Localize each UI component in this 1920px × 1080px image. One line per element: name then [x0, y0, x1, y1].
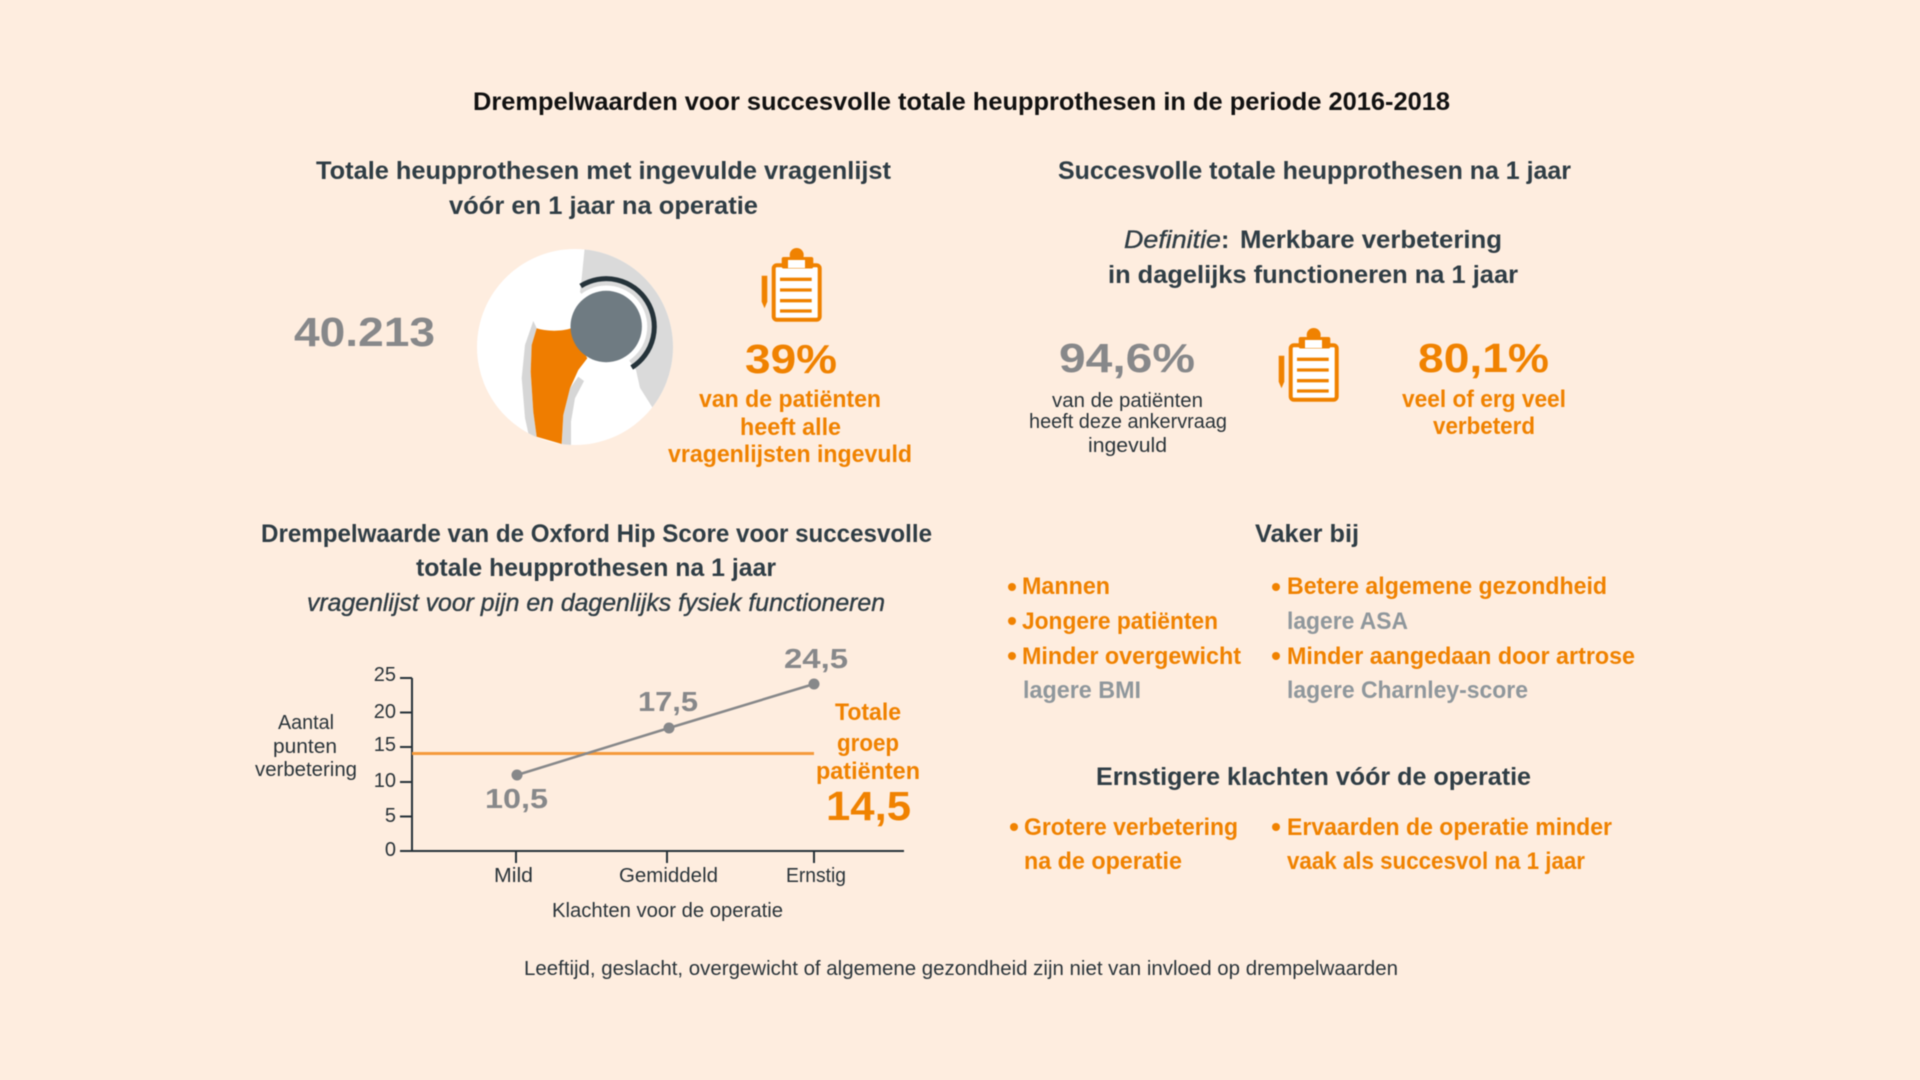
threshold line: [412, 752, 814, 755]
callout: totale groep patiënten: groep: [837, 730, 899, 757]
value labels: 10,5: [485, 783, 548, 814]
caption: 80,1%: verbeterd: [1433, 413, 1535, 440]
caption: 39%: van de patiënten: [699, 386, 881, 413]
value labels: 24,5: [784, 643, 848, 674]
footnote: Leeftijd, geslacht, overgewicht of algemene gezondheid zijn niet van invloed op drempelwaarden: [524, 958, 1398, 980]
y-axis tick labels: 25: [374, 664, 396, 686]
y-axis tick labels: 0: [385, 839, 396, 861]
caption: 94,6%: ingevuld: [1088, 435, 1167, 457]
icon: hip prosthesis: [476, 248, 674, 446]
heading: ingevulde vragenlijst: vóór en 1 jaar na operatie: [449, 192, 758, 220]
y-axis label: [255, 712, 357, 781]
x-axis labels: Mild: [494, 865, 533, 887]
definition: in dagelijks functioneren na 1 jaar: [1108, 261, 1518, 289]
definition: Definitie: [1124, 226, 1221, 254]
callout: totale groep patiënten: Totale: [835, 699, 901, 726]
x-axis labels: Ernstig: [786, 865, 846, 887]
value labels: [485, 643, 848, 814]
list: right column: lagere Charnley-score: [1287, 677, 1528, 704]
panel: ernstigere klachten: [1010, 763, 1612, 875]
icon: clipboard: [762, 248, 820, 320]
y-axis tick labels: [374, 664, 396, 861]
list: left column: Jongere patiënten: [1022, 608, 1218, 635]
heading: Oxford Hip Score: totale heupprothesen na 1 jaar: [416, 554, 776, 582]
definition: Merkbare verbetering: [1240, 226, 1502, 254]
y-axis label: punten: [273, 736, 337, 758]
list: right column: Minder aangedaan door artrose: [1287, 643, 1635, 670]
x-axis labels: Gemiddeld: [619, 865, 718, 887]
heading: vaker bij: Vaker bij: [1255, 520, 1359, 548]
panel: ingevulde vragenlijst: [294, 157, 912, 468]
list: right column: Betere algemene gezondheid: [1287, 573, 1607, 600]
list: ervaarden: [1272, 814, 1612, 875]
callout: totale groep patiënten: patiënten: [816, 758, 920, 785]
x-axis labels: Klachten voor de operatie: [552, 900, 783, 922]
y-axis tick labels: 20: [374, 701, 396, 723]
caption: 80,1%: veel of erg veel: [1402, 386, 1566, 413]
list: grotere verbetering: Grotere verbetering: [1024, 814, 1238, 841]
y-axis label: verbetering: [255, 759, 357, 781]
list: left column: Mannen: [1022, 573, 1110, 600]
caption: 39%: heeft alle: [740, 414, 841, 441]
heading: ernstigere klachten: Ernstigere klachten vóór de operatie: [1096, 763, 1531, 791]
list: right column: [1272, 573, 1635, 704]
list: grotere verbetering: [1010, 814, 1238, 875]
list: right column: lagere ASA: [1287, 608, 1408, 635]
heading: succesvolle heupprothesen: Succesvolle totale heupprothesen na 1 jaar: [1058, 157, 1571, 185]
list: left column: Minder overgewicht: [1022, 643, 1241, 670]
heading: Oxford Hip Score: vragenlijst voor pijn en dagenlijks fysiek functioneren: [307, 589, 885, 617]
line chart: [255, 643, 920, 922]
list: left column: [1008, 573, 1241, 704]
title: Drempelwaarden voor succesvolle totale heupprothesen in de periode 2016-2018: [473, 88, 1450, 116]
callout: totale groep patiënten: 14,5: [826, 783, 911, 829]
caption: 80,1%: [1402, 386, 1566, 440]
y-axis tick labels: 15: [374, 734, 396, 756]
heading: ingevulde vragenlijst: Totale heupprothesen met ingevulde vragenlijst: [316, 157, 892, 185]
caption: 94,6%: van de patiënten: [1052, 390, 1203, 412]
heading: Oxford Hip Score: Drempelwaarde van de Oxford Hip Score voor succesvolle: [261, 520, 932, 548]
list: left column: lagere BMI: [1023, 677, 1141, 704]
definition: :: [1221, 226, 1229, 254]
panel: vaker bij: [1008, 520, 1635, 704]
caption: 94,6%: [1029, 390, 1227, 457]
y-axis tick labels: 10: [374, 770, 396, 792]
panel: succesvolle heupprothesen: [1029, 157, 1571, 457]
x-axis labels: [494, 865, 846, 922]
caption: 39%: vragenlijsten ingevuld: [668, 441, 912, 468]
heading: Oxford Hip Score: [261, 520, 932, 617]
panel: Oxford Hip Score: [255, 520, 932, 922]
y-axis label: Aantal: [278, 712, 334, 734]
caption: 94,6%: heeft deze ankervraag: [1029, 411, 1227, 433]
list: ervaarden: Ervaarden de operatie minder: [1287, 814, 1612, 841]
list: ervaarden: vaak als succesvol na 1 jaar: [1287, 848, 1585, 875]
axes: [400, 678, 904, 863]
number: 39%: 39%: [745, 336, 837, 382]
definition: [1108, 226, 1518, 289]
heading: ingevulde vragenlijst: [316, 157, 892, 220]
number: 40.213: 40.213: [294, 309, 435, 355]
number: 80,1%: 80,1%: [1418, 335, 1549, 381]
icon: clipboard: [1279, 328, 1337, 400]
list: grotere verbetering: na de operatie: [1024, 848, 1182, 875]
caption: 39%: [668, 386, 912, 468]
number: 94,6%: 94,6%: [1059, 335, 1195, 381]
y-axis tick labels: 5: [385, 805, 396, 827]
callout: totale groep patiënten: [816, 699, 920, 829]
value labels: 17,5: [638, 686, 698, 717]
data line: [512, 678, 820, 780]
